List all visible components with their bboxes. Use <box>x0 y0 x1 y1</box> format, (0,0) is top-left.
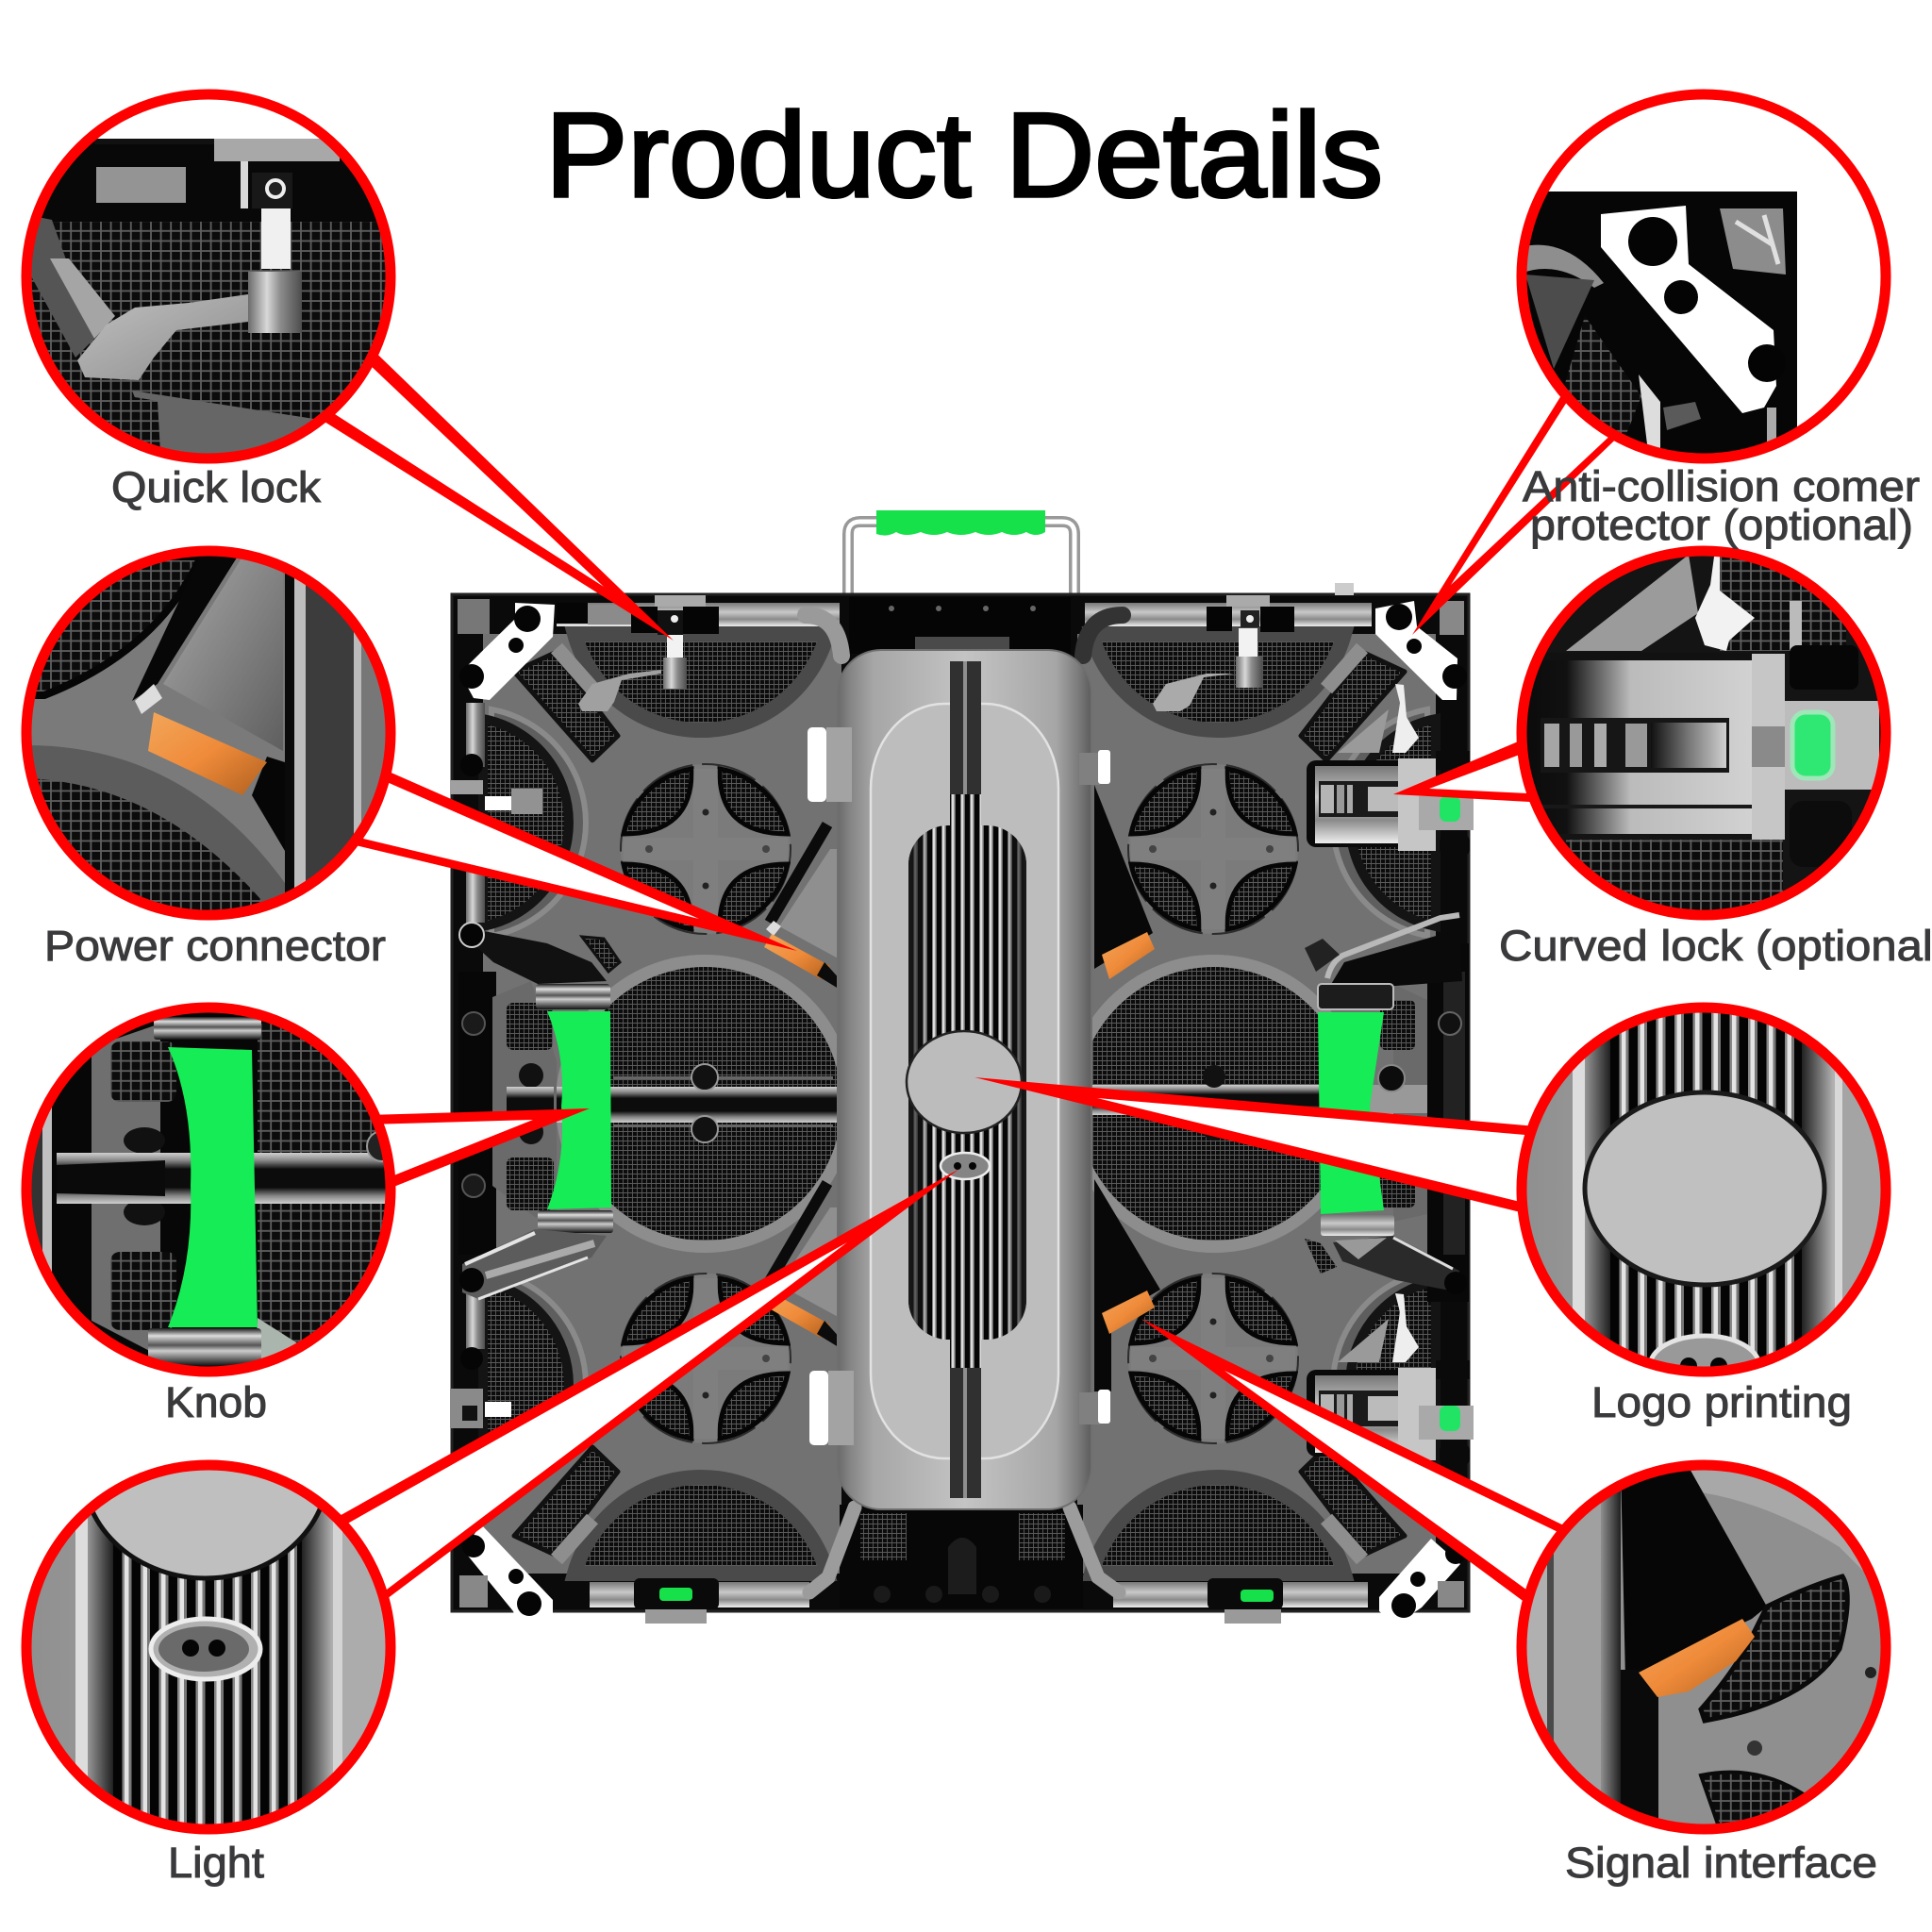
magnifier: curved lock <box>1519 551 1886 915</box>
bottom latch left <box>634 1578 719 1624</box>
magnifier: light <box>21 1460 396 1834</box>
callout wedge: quick lock <box>302 336 674 641</box>
horizontal bars across the knobs <box>507 1064 1427 1142</box>
magnifier: logo printing <box>1522 1005 1890 1396</box>
label: power connector: Power connector <box>44 922 386 970</box>
magnifier: quick lock <box>26 94 391 458</box>
callout wedge: knob <box>368 1108 590 1197</box>
callout wedge: curved lock <box>1393 729 1547 803</box>
bottom and top frame rails <box>557 603 1372 1607</box>
bottom latch right <box>1208 1578 1283 1624</box>
magnifier: corner protector <box>1521 94 1886 465</box>
label: logo printing: Logo printing <box>1591 1378 1852 1426</box>
top center bracket <box>849 597 1071 654</box>
left edge tubes and side connector <box>450 703 542 1428</box>
curved lock upper <box>1307 684 1474 857</box>
magnifier: signal interface <box>1519 1462 1887 1835</box>
right connectors and black triangles <box>1094 785 1160 1391</box>
callout wedge: light <box>321 1169 959 1613</box>
label: anti-collision corner protector: protector (optional) <box>1530 501 1913 549</box>
logo disc <box>907 1031 1022 1133</box>
callout wedge: signal interface <box>1141 1319 1575 1619</box>
side tabs <box>808 727 1110 1445</box>
label: curved lock: Curved lock (optional) <box>1499 922 1932 970</box>
bottom center bracket <box>840 1505 1083 1608</box>
magnifier: power connector <box>26 547 391 920</box>
spine housing <box>838 650 1091 1509</box>
label: light: Light <box>168 1839 265 1887</box>
left knob <box>458 923 620 1299</box>
status light <box>941 1153 990 1179</box>
quick lock right <box>1153 583 1354 711</box>
left power connector and band <box>764 824 841 1349</box>
label: anti-collision corner protector <box>1523 462 1920 549</box>
quick lock left <box>557 595 719 711</box>
label: anti-collision corner protector: Anti-collision comer <box>1523 462 1920 510</box>
label: quick lock: Quick lock <box>111 463 322 511</box>
label: signal interface: Signal interface <box>1565 1839 1877 1887</box>
callout wedge: corner protector <box>1412 358 1632 635</box>
LED panel rear view <box>450 510 1474 1624</box>
cast body quadrants with mesh and fans <box>483 634 1436 1574</box>
callout wedge: logo printing <box>974 1077 1547 1219</box>
magnifier: knob <box>26 1008 399 1372</box>
title: Product Details <box>545 88 1383 222</box>
label: knob: Knob <box>165 1378 267 1426</box>
curved lock lower <box>1307 1293 1474 1466</box>
carry handle <box>848 510 1074 604</box>
right knob <box>1305 915 1469 1302</box>
corner protectors <box>458 599 1467 1624</box>
panel frame <box>452 594 1469 1611</box>
callout wedge: power connector <box>340 760 797 951</box>
curved tubes to the spine <box>806 615 1123 1592</box>
